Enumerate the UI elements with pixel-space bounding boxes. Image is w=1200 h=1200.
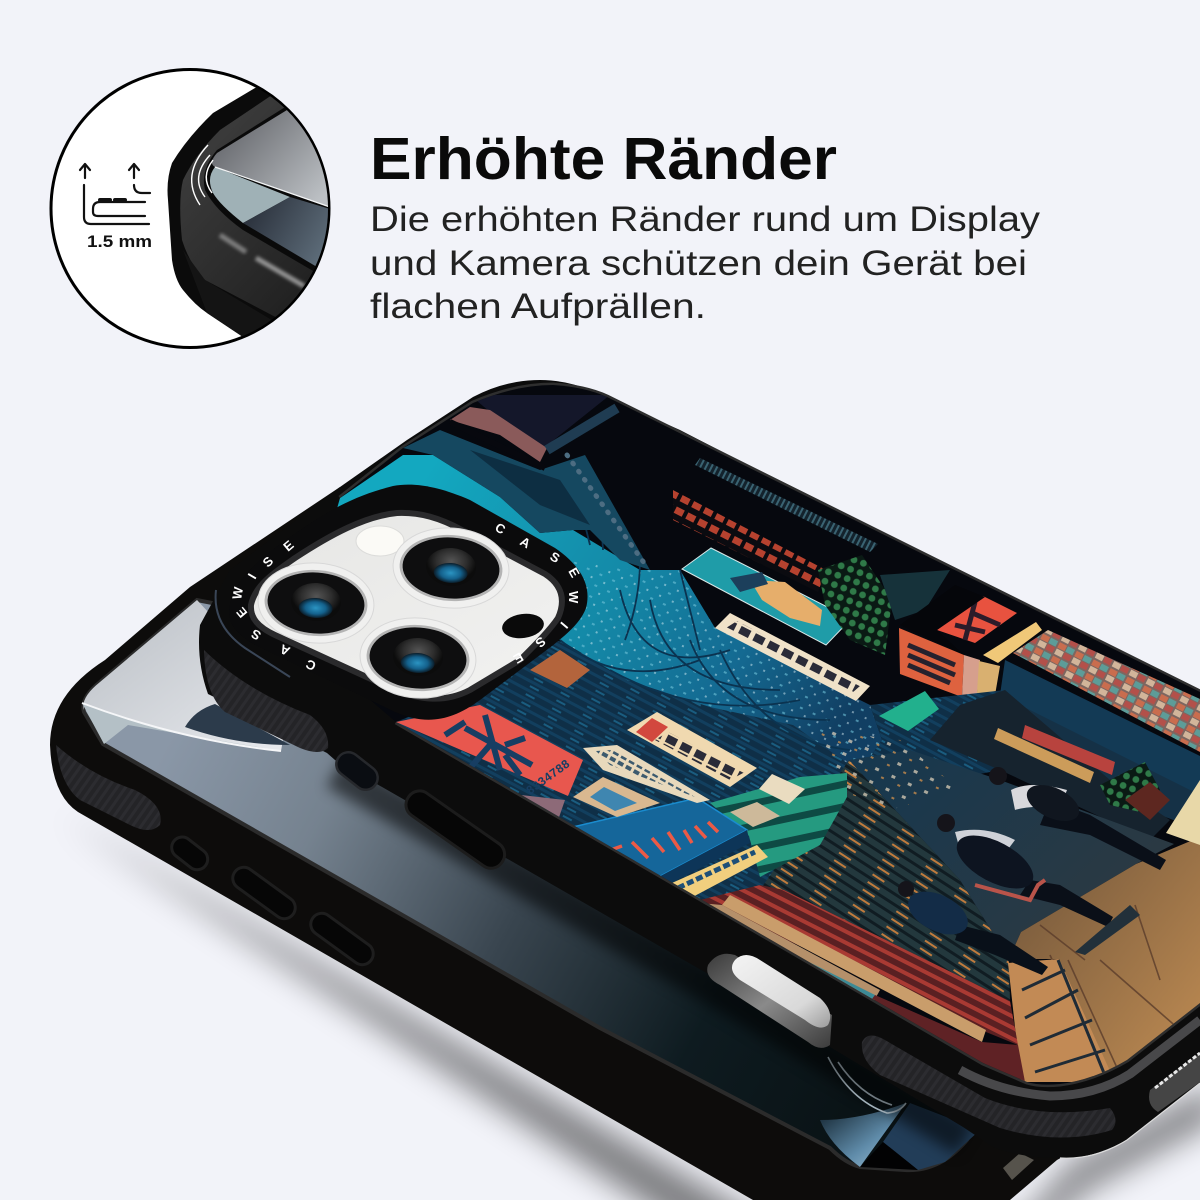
screen light wallpaper top-left bbox=[83, 600, 290, 751]
navy top block bbox=[470, 395, 610, 447]
dark sign underside bbox=[653, 830, 750, 887]
closeup screen pale bbox=[210, 167, 290, 223]
orange block sign bbox=[899, 628, 964, 697]
red sign number: 8334788 bbox=[524, 757, 572, 797]
dark stalls behind green sign bbox=[870, 690, 1001, 774]
description text bbox=[370, 200, 1041, 326]
closeup lower shade bbox=[183, 250, 275, 337]
lens bottom bbox=[357, 614, 479, 702]
art sliver beside camera bbox=[216, 590, 290, 677]
beige vertical sign bbox=[977, 661, 1000, 693]
right shop goods bbox=[1027, 708, 1192, 820]
closeup highlight one bbox=[220, 235, 246, 252]
kanji glyph on red sign bbox=[445, 715, 532, 775]
impact arcs bbox=[192, 145, 213, 205]
building hanging from roof bbox=[403, 430, 650, 570]
wallpaper white swoosh bbox=[82, 703, 281, 751]
lens top right bbox=[390, 524, 512, 612]
beaded rooftop edge bbox=[567, 455, 647, 567]
beige sign blue inset bbox=[590, 787, 637, 811]
small orange sign behind camera bbox=[530, 650, 590, 688]
blue shop band bbox=[1000, 660, 1200, 800]
red shop shutter bbox=[700, 885, 1018, 1045]
closeup outer case bbox=[168, 80, 340, 340]
dark storefront bbox=[930, 690, 1170, 840]
small white sign bbox=[759, 774, 805, 804]
street side stripes bbox=[760, 760, 1010, 1001]
lower phone bottom port bbox=[1003, 1153, 1034, 1180]
head bbox=[898, 881, 914, 897]
charging port silver insert bbox=[732, 955, 830, 1028]
notice sign bbox=[583, 745, 710, 803]
backpack bbox=[901, 883, 975, 943]
foliage dark right bbox=[880, 570, 950, 620]
camera lip line bbox=[134, 185, 150, 193]
blue shop sign glyphs bbox=[605, 822, 718, 858]
closeup screen line bbox=[215, 167, 330, 207]
teal shop strip bbox=[725, 925, 875, 1005]
sign pillar bbox=[962, 655, 980, 697]
closeup grey band bbox=[180, 90, 340, 322]
street surface bbox=[849, 750, 1174, 959]
lower phone: case with screen bbox=[50, 487, 1200, 1200]
long sign glyphs bbox=[726, 621, 860, 693]
floor cracks bbox=[1040, 905, 1180, 1078]
brown floor bbox=[1009, 837, 1200, 1080]
head bbox=[989, 767, 1007, 785]
beige top sign bbox=[983, 622, 1042, 663]
detail circle bbox=[51, 70, 340, 348]
arm bbox=[975, 880, 1045, 900]
contact shadow on screen bbox=[335, 772, 965, 1140]
pink awning bbox=[450, 407, 547, 462]
legs bbox=[955, 925, 1048, 975]
wallpaper black triangle bbox=[860, 1142, 918, 1170]
description line 3: flachen Aufprällen. bbox=[370, 287, 706, 326]
pedestrian middle bbox=[937, 814, 1113, 927]
brand text left: CASEWISE bbox=[229, 537, 318, 674]
circle background bbox=[51, 70, 329, 348]
brand text right: CASEWISE bbox=[492, 520, 583, 667]
speaker grille bbox=[1149, 1053, 1200, 1112]
description line 2: und Kamera schützen dein Gerät bei bbox=[370, 244, 1027, 283]
tan plank bbox=[722, 895, 986, 1042]
orange block sign glyphs bbox=[908, 645, 955, 683]
wallpaper blue fan right bbox=[883, 1103, 980, 1170]
pedestrian near bbox=[898, 881, 1048, 975]
closeup screen grey bbox=[212, 110, 340, 207]
lower phone action button bbox=[167, 833, 212, 874]
outer silver edge bbox=[1060, 1083, 1200, 1158]
lens left bbox=[255, 559, 377, 647]
backpack bbox=[1021, 778, 1085, 828]
lower phone screen bbox=[83, 600, 1000, 1170]
potted plant bbox=[1100, 762, 1160, 812]
lower phone volume up button bbox=[228, 863, 300, 923]
silent switch slot bbox=[331, 747, 383, 795]
dark red lower wall bbox=[865, 995, 1025, 1082]
upper phone bump carbon patch bbox=[204, 650, 328, 752]
wallpaper arcs bbox=[828, 1057, 906, 1113]
upper phone side button bbox=[401, 786, 510, 873]
brick building corner bbox=[1008, 959, 1115, 1082]
closeup highlight two bbox=[256, 258, 304, 286]
yellow shop sign bbox=[663, 845, 768, 900]
tan and teal shop front bbox=[688, 902, 880, 1008]
pedestrian far bbox=[989, 767, 1166, 870]
red roof sign glyphs bbox=[955, 602, 1000, 640]
art dark base bbox=[300, 380, 1200, 1090]
kanji sign red corner bbox=[636, 718, 668, 742]
legs bbox=[1020, 880, 1113, 927]
teal awning bbox=[710, 773, 847, 877]
lower phone volume down button bbox=[306, 909, 378, 969]
teal sky bbox=[330, 455, 882, 772]
brick seams bbox=[1022, 960, 1106, 1078]
arrow right bbox=[129, 164, 139, 178]
kanji sign glyphs bbox=[655, 732, 745, 780]
bottom corner carbon patch bbox=[862, 1035, 1116, 1138]
long white sign bbox=[715, 613, 870, 701]
green foliage upper bbox=[818, 555, 892, 655]
yellow sign glyphs bbox=[678, 852, 755, 888]
green hanging sign bbox=[879, 691, 939, 731]
description line 1: Die erhöhten Ränder rund um Display bbox=[370, 200, 1041, 239]
wallpaper blue fans bottom right bbox=[820, 1103, 906, 1167]
red roof sign bbox=[937, 596, 1017, 643]
camera plate bbox=[251, 513, 562, 699]
ring outer bbox=[229, 485, 588, 720]
backpack bbox=[949, 825, 1041, 899]
red goods row bbox=[1022, 725, 1115, 775]
teal poster sign bbox=[682, 548, 851, 645]
closeup screen dark wedge bbox=[243, 197, 340, 272]
upper phone: case body bbox=[199, 380, 1200, 1158]
legs bbox=[1040, 800, 1166, 870]
rim highlight along bottom corner bbox=[960, 1020, 1200, 1096]
hanging wires bbox=[560, 530, 850, 751]
shirt bbox=[955, 830, 1015, 860]
floor shadows bbox=[1075, 905, 1140, 955]
arrow left bbox=[80, 164, 90, 178]
rooftop vent bbox=[695, 458, 878, 552]
lower left purple shop bbox=[495, 792, 565, 828]
upper phone outer body bbox=[199, 380, 1200, 1158]
tan sign far right bbox=[1166, 780, 1200, 845]
drop shadow under phones bbox=[62, 815, 1200, 1200]
case back rim bbox=[340, 385, 1200, 1085]
wallpaper dark wedge bbox=[185, 704, 290, 745]
closeup black lip bbox=[204, 100, 340, 275]
charging port recess bbox=[707, 954, 832, 1048]
beige blue sign bbox=[573, 777, 660, 817]
camera bumps bbox=[100, 198, 125, 202]
title: Erhöhte Ränder bbox=[370, 126, 837, 192]
building dark detail bbox=[470, 450, 590, 525]
small beige sign bbox=[730, 802, 780, 827]
camera ring with lenses bbox=[229, 485, 588, 720]
tan store sign bbox=[994, 728, 1094, 783]
plant pot bbox=[1125, 782, 1170, 820]
lidar bbox=[501, 611, 545, 641]
navy buildings under sky bbox=[396, 630, 865, 905]
diagonal roof beam bbox=[547, 408, 617, 450]
beige kanji sign bbox=[627, 712, 757, 787]
notice sign text rows bbox=[596, 750, 695, 797]
outer case line bbox=[84, 185, 149, 224]
lower phone frame bbox=[50, 487, 1200, 1200]
red kanji sign bbox=[396, 705, 583, 797]
lower phone corner carbon patch bbox=[56, 745, 161, 830]
sky dots bbox=[560, 560, 882, 772]
phone body line bbox=[93, 202, 145, 216]
right shop shelf bbox=[1013, 630, 1200, 752]
height label: 1.5 mm bbox=[87, 232, 152, 251]
blue shop sign bbox=[560, 798, 747, 880]
black box roof bbox=[916, 596, 985, 630]
brick wall bbox=[673, 490, 826, 592]
shirt bbox=[1011, 785, 1067, 810]
poster figure hair bbox=[730, 572, 768, 592]
raised edge icon bbox=[80, 164, 150, 224]
phone corner closeup bbox=[168, 80, 340, 340]
flash bbox=[356, 526, 404, 556]
wallpaper pale wedge bbox=[82, 703, 281, 751]
poster figure bbox=[750, 580, 822, 626]
street lights cluster bbox=[820, 730, 960, 810]
awning black stripe bbox=[450, 422, 545, 468]
case back artwork: night street bbox=[300, 380, 1200, 1090]
head bbox=[937, 814, 955, 832]
